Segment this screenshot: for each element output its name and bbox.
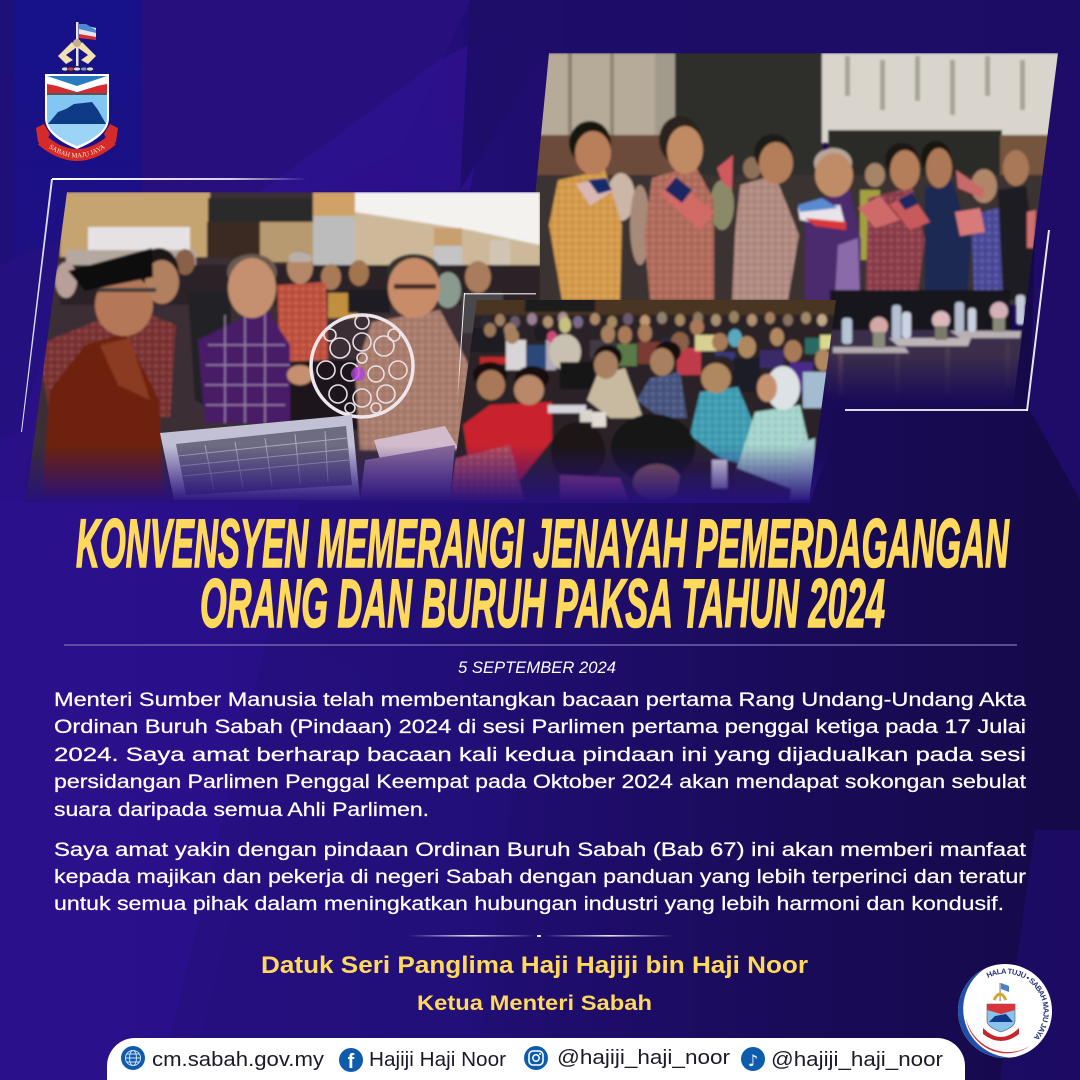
figure: foreground heads — [551, 413, 729, 499]
icon: lit sphere prototype — [311, 315, 413, 417]
figure: woman in white hijab and mint dress — [737, 366, 808, 492]
text block: paragraph one: suara daripada semua Ahli Parlimen. — [54, 799, 429, 821]
figure: man with spectacles behind — [38, 248, 179, 417]
icon: motto ribbon: SABAH MAJU JAYA — [49, 144, 106, 158]
text block: paragraph two: untuk semua pihak dalam meningkatkan hubungan industri yang lebih harmoni dan kondusif. — [54, 893, 1004, 915]
icon: small coat of arms — [983, 983, 1019, 1041]
icon: shield — [45, 74, 109, 149]
figure: man in yellow batik — [549, 121, 622, 300]
icon: facebook — [339, 1048, 363, 1073]
icon: beads — [62, 67, 94, 71]
text block: paragraph two: kepada majikan dan pekerja di negeri Sabah dengan panduan yang lebih terperinci dan teratur — [54, 866, 1027, 888]
photo: seated audience — [440, 298, 840, 508]
icon: instagram — [524, 1046, 548, 1070]
text block: paragraph one: 2024. Saya amat berharap bacaan kali kedua pindaan ini yang dijadualkan pada sesi — [54, 744, 1026, 766]
flags — [576, 155, 1036, 248]
facebook name: Hajiji Haji Noor — [369, 1049, 506, 1071]
title — [76, 505, 1010, 642]
figure: man in blue batik and man in black suit — [830, 150, 1034, 330]
decorative frame: left photo — [21, 178, 307, 432]
figure: man in black hat and red baju — [42, 248, 163, 495]
text block: paragraph one: persidangan Parlimen Penggal Keempat pada Oktober 2024 akan mendapat sokongan sebulat — [54, 771, 1027, 793]
text block: paragraph two: Saya amat yakin dengan pindaan Ordinan Buruh Sabah (Bab 67) ini akan memberi manfaat — [54, 839, 1027, 861]
tables with bottles and flowers — [825, 295, 1045, 405]
logo: Hala Tuju round badge: HALA TUJU • SABAH MAJU JAYA — [986, 968, 1049, 1040]
figure: man in red and white batik — [644, 116, 714, 300]
figure: man in blue shirt — [637, 341, 687, 418]
text block: paragraph two — [54, 839, 1027, 915]
figure: chief minister in purple shirt — [198, 254, 313, 423]
photo: left, officials at exhibition booth — [26, 192, 546, 500]
instagram handle: @hajiji_haji_noor — [557, 1047, 730, 1069]
icon: raised arms — [58, 39, 96, 64]
figure: men in red with phone — [450, 362, 552, 505]
figure: man in red batik background — [277, 250, 328, 362]
date: 5 SEPTEMBER 2024 — [458, 658, 616, 677]
divider — [64, 644, 1017, 646]
figure: man in purple shirt — [805, 148, 861, 308]
figure: man in beige — [587, 345, 643, 418]
tiktok handle: @hajiji_haji_noor — [771, 1049, 943, 1071]
signature divider — [408, 935, 674, 937]
text block: paragraph one — [54, 689, 1027, 821]
icon: laptop — [160, 415, 458, 500]
icon: facebook: f — [348, 1051, 355, 1073]
website: cm.sabah.gov.my — [152, 1049, 324, 1071]
icon: tiktok — [741, 1047, 765, 1071]
figure: man in teal baju — [690, 356, 752, 465]
contact bar — [107, 1038, 965, 1080]
icon: flag on pole — [76, 22, 96, 66]
figure: man in navy suit — [920, 141, 972, 291]
text block: paragraph one: Ordinan Buruh Sabah (Pindaan) 2024 di sesi Parlimen pertama penggal ketiga pada 17 Julai — [54, 716, 1026, 738]
decorative frame: photo overlap and right photo — [457, 230, 1050, 411]
signature: name: Datuk Seri Panglima Haji Hajiji bin Haji Noor — [261, 952, 808, 979]
text block: paragraph one: Menteri Sumber Manusia telah membentangkan bacaan pertama Rang Undang-Undang Akta — [54, 689, 1026, 711]
logo: Hala Tuju round badge — [958, 964, 1052, 1058]
logo: Sabah coat of arms — [36, 22, 118, 161]
icon: tiktok: ♪ — [748, 1051, 758, 1070]
figure: man in maroon batik — [866, 143, 925, 290]
icon: globe — [121, 1046, 145, 1070]
figure: man in pink batik — [732, 134, 799, 300]
figure: black-shirted man behind center — [188, 298, 232, 404]
figure: man in batik shirt right — [355, 254, 469, 450]
bottom fade over photos — [24, 445, 830, 503]
signature: position: Ketua Menteri Sabah — [417, 992, 652, 1015]
photo: top right, leaders holding flags — [520, 53, 1062, 406]
